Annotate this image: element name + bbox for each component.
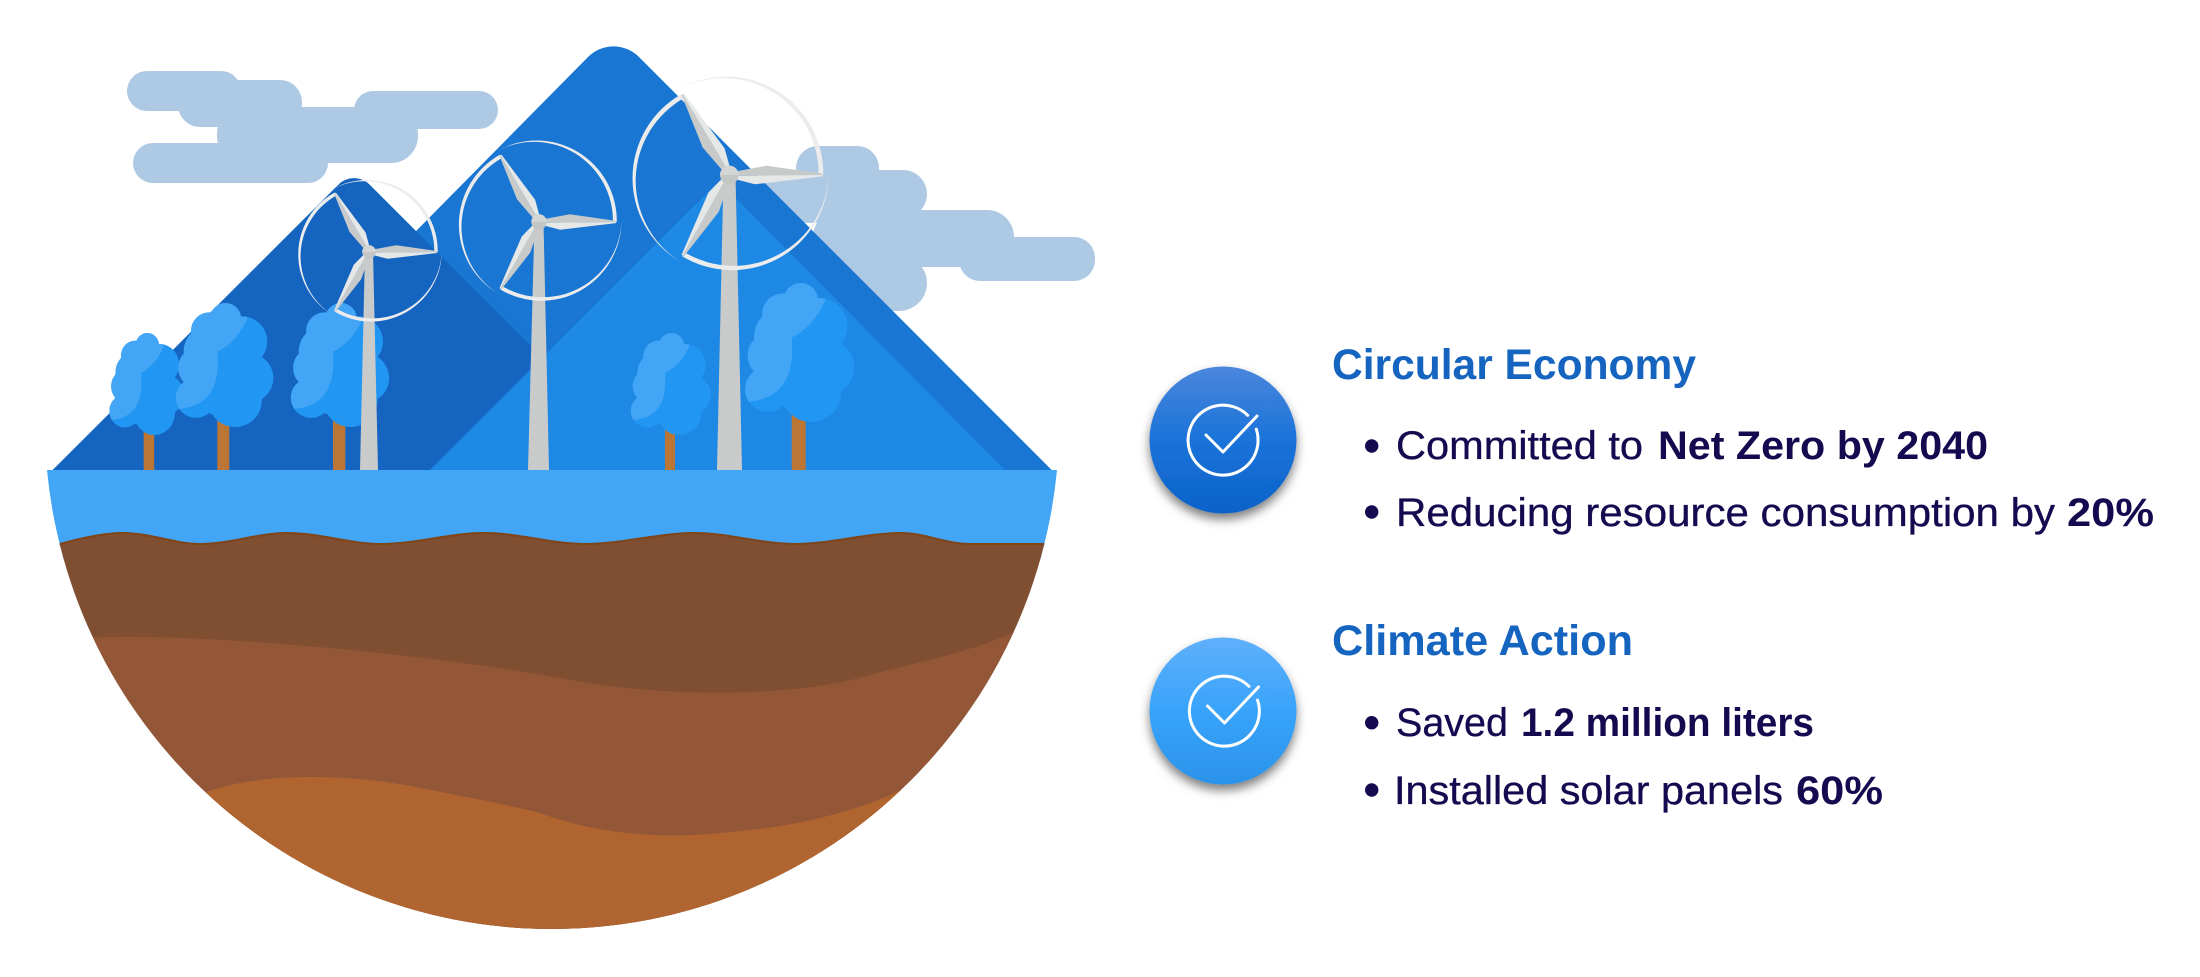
clouds: right group <box>750 146 1095 311</box>
wind turbine 3 <box>597 77 839 470</box>
heading: Climate Action: Climate Action <box>1332 617 1633 665</box>
list item: resource consumption: Reducing resource consumption by <box>1396 491 2055 535</box>
tree 5 <box>736 276 866 470</box>
soil layer: dark top <box>40 533 1070 940</box>
illustration: wind farm landscape <box>30 46 1095 940</box>
wind turbine 2 <box>430 141 630 470</box>
bullet list: Climate Action <box>1365 701 1883 813</box>
list item: liters saved: Saved <box>1396 701 1508 745</box>
list item: Net Zero: Net Zero by 2040 <box>1658 424 1988 468</box>
bullet list: Circular Economy <box>1365 424 2154 535</box>
list item: solar panels: 60% <box>1796 769 1883 813</box>
list item: resource consumption: 20% <box>2067 491 2154 535</box>
heading: Circular Economy: Circular Economy <box>1332 341 1696 389</box>
icon: blue check badge <box>1150 366 1296 514</box>
wind turbine 1 <box>272 180 449 470</box>
mountain: tall middle peak <box>180 46 1052 470</box>
clouds: left group <box>127 71 498 183</box>
soil layer: middle <box>93 633 1014 929</box>
mountain: dark left peak <box>53 178 542 470</box>
tree 2 <box>168 297 284 470</box>
icon: light blue check badge <box>1150 638 1296 784</box>
tree 4 <box>624 328 719 470</box>
ground bowl: water and soil layers <box>30 470 1080 940</box>
tree 1 <box>103 328 192 470</box>
water band <box>30 470 1080 560</box>
tree 3 <box>283 297 400 470</box>
soil layer: bottom <box>206 777 901 929</box>
list item: Net Zero <box>1365 424 1988 468</box>
list item: liters saved <box>1365 701 1814 745</box>
mountain: light front peak <box>430 184 1005 470</box>
list item: solar panels: Installed solar panels <box>1394 769 1783 813</box>
list item: Net Zero: Committed to <box>1396 424 1643 468</box>
list item: liters saved: 1.2 million liters <box>1521 701 1814 745</box>
